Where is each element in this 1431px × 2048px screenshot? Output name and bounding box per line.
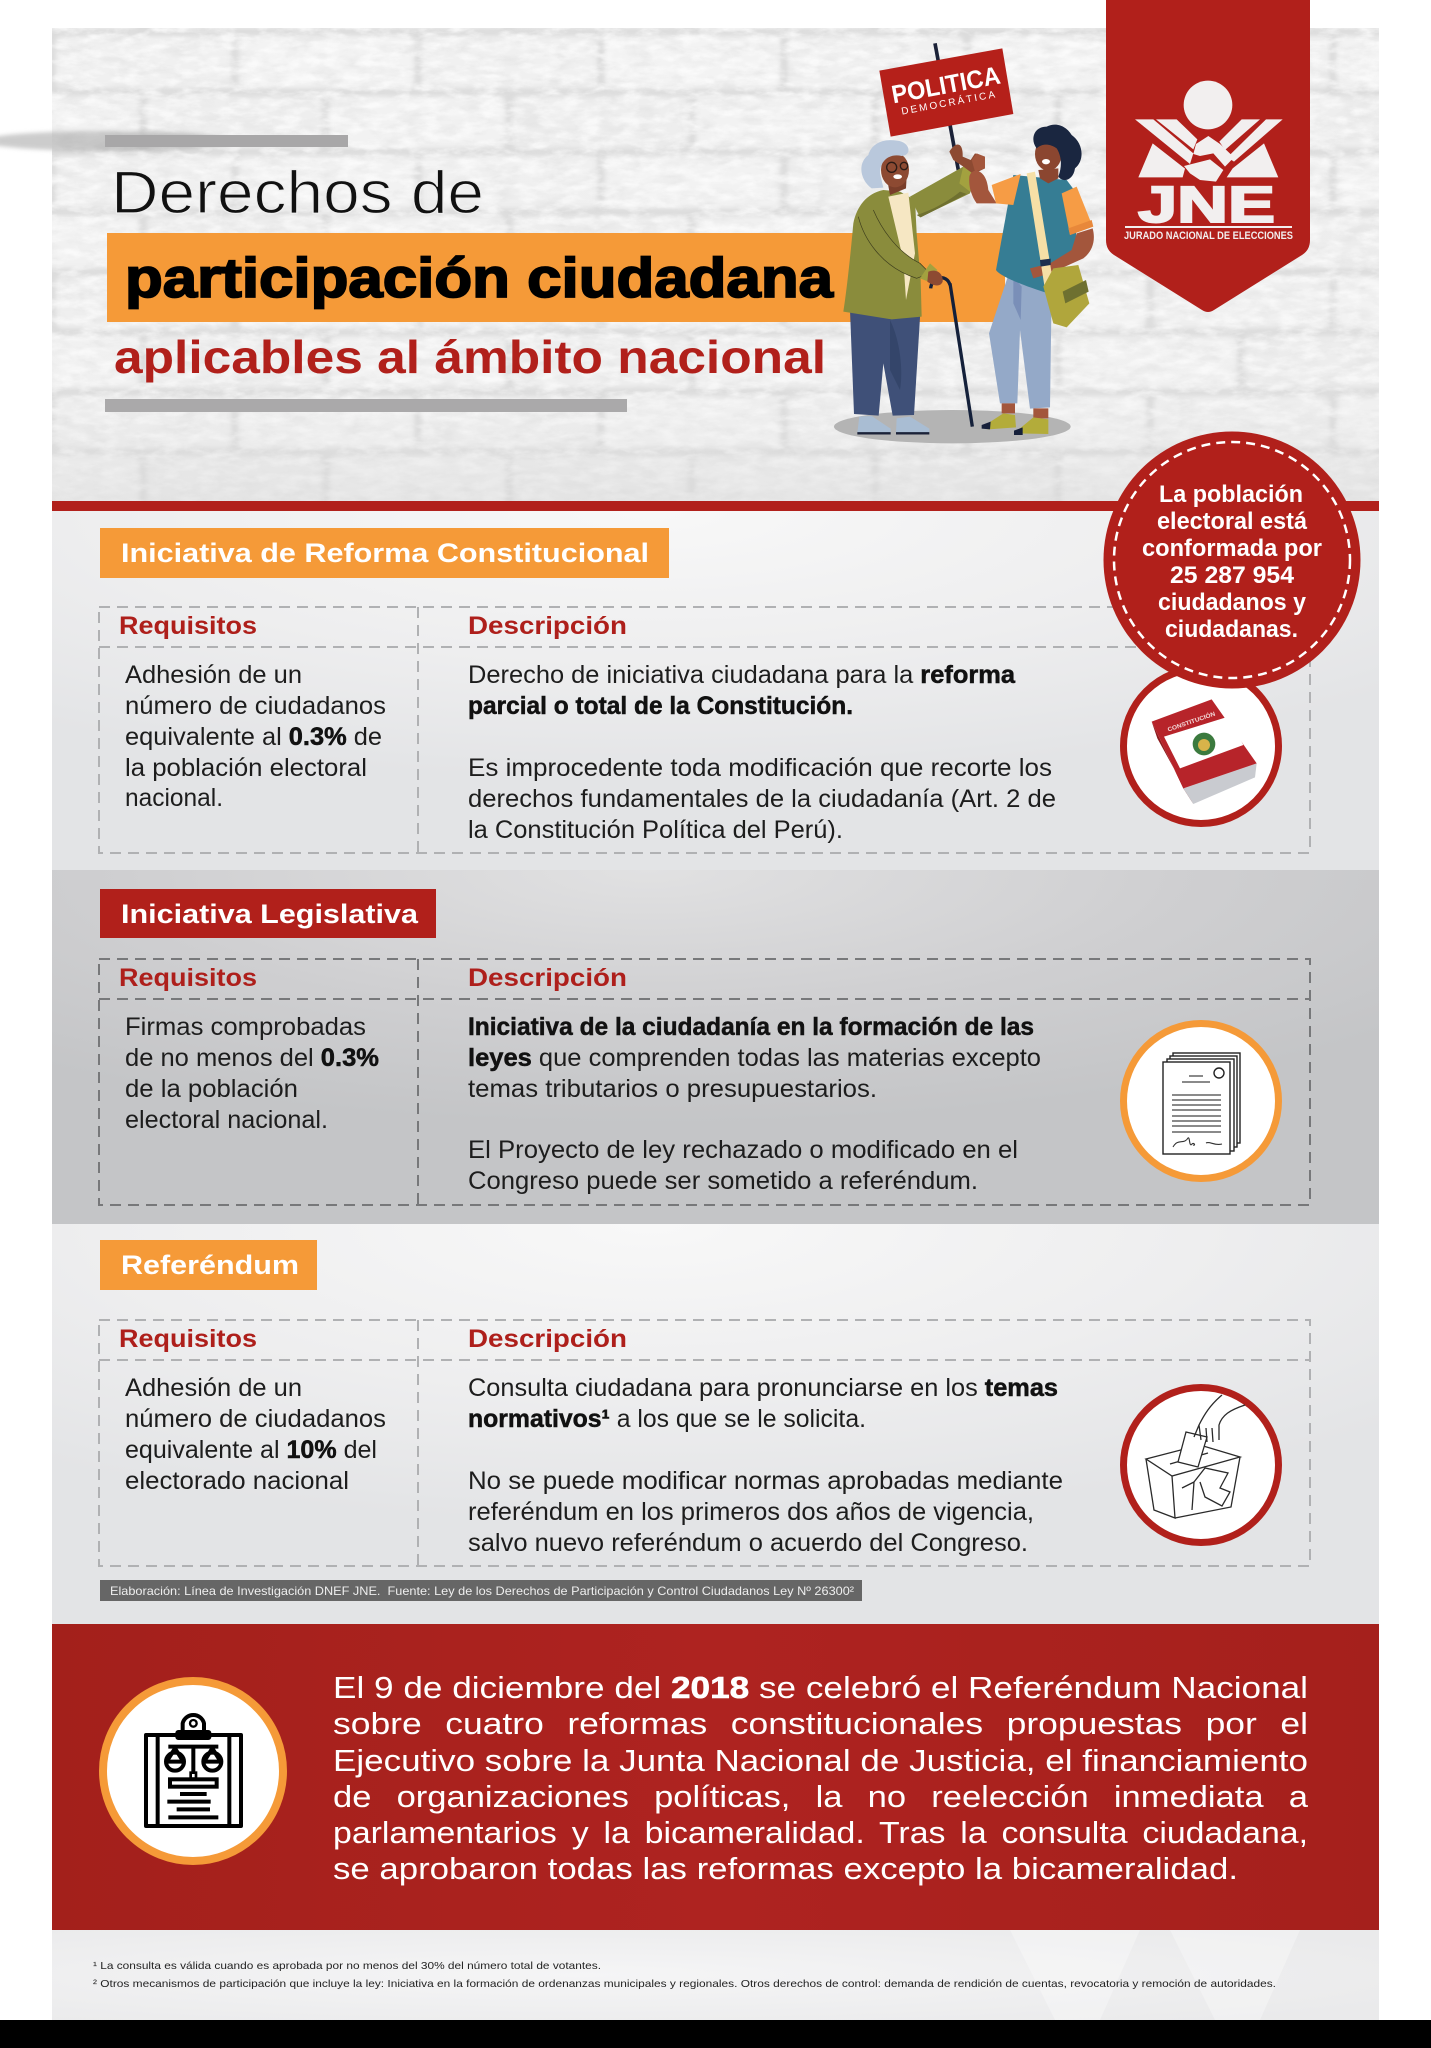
requisitos text 1: número de ciudadanos [125,692,386,720]
panel text: parlamentarios y la bicameralidad. Tras la consulta ciudadana, [333,1815,1308,1850]
section band: reforma constitucional [52,511,1379,870]
requisitos text 2 [125,1013,379,1134]
logo letters: JNE [1138,176,1275,233]
descripcion text 2: Iniciativa de la ciudadanía en la formación de las [468,1013,1034,1041]
callout badge: electoral population: La población [1159,481,1303,508]
dashed table 1 [99,607,1310,853]
dashed table 3 [99,1320,1310,1566]
descripcion text 3 [468,1374,1063,1557]
requisitos text 3: número de ciudadanos [125,1405,386,1433]
JNE banner with logo [1106,0,1310,312]
title line 2: participación ciudadana [125,246,834,309]
requisitos text 1 [125,661,386,812]
title line 3: aplicables al ámbito nacional [114,331,826,383]
footnotes: ¹ La consulta es válida cuando es aprobada por no menos del 30% del número total de votantes. [93,1960,601,1972]
descripcion text 1 [468,661,1056,844]
requisitos text 3 [125,1374,386,1495]
descripcion text 3: Consulta ciudadana para pronunciarse en los temas [468,1374,1058,1402]
descripcion text 1: Derecho de iniciativa ciudadana para la reforma [468,661,1016,689]
descripcion text 1: parcial o total de la Constitución. [468,692,853,720]
dashed table 2 [99,959,1310,1205]
icon: ballot box [1124,1388,1278,1542]
source strip: Elaboración: Línea de Investigación DNEF JNE. Fuente: Ley de los Derechos de Participación y Control Ciudadanos Ley Nº 26300² [110,1584,854,1598]
callout badge: electoral population: electoral está [1157,508,1308,535]
label: iniciativa legislativa: Iniciativa Legislativa [121,899,419,929]
descripcion text 2: leyes que comprenden todas las materias excepto [468,1044,1041,1072]
footnotes [93,1960,1276,1990]
headings table 3: Descripción [468,1325,627,1353]
requisitos text 1: Adhesión de un [125,661,302,689]
callout badge: electoral population: ciudadanos y [1158,589,1307,616]
requisitos text 3: Adhesión de un [125,1374,302,1402]
title highlight bar [107,233,1005,322]
headings table 1 [119,612,627,640]
red divider line [52,501,1379,511]
requisitos text 2: de la población [125,1075,298,1103]
requisitos text 2: Firmas comprobadas [125,1013,366,1041]
descripcion text 2 [468,1013,1041,1195]
panel text: sobre cuatro reformas constitucionales propuestas por el [333,1706,1308,1741]
panel text: Ejecutivo sobre la Junta Nacional de Justicia, el financiamiento [333,1743,1308,1778]
requisitos text 3: equivalente al 10% del [125,1436,377,1464]
panel text: de organizaciones políticas, la no reelección inmediata a [333,1779,1309,1814]
logo mark [1135,81,1283,182]
title line 1: Derechos de [111,159,484,226]
sign [879,48,1013,137]
descripcion text 3: normativos¹ a los que se le solicita. [468,1405,866,1433]
footnotes: ² Otros mecanismos de participación que incluye la ley: Iniciativa en la formación de ordenanzas municipales y regionales. Otros derechos de control: demanda de rendición de cuentas, revocatoria y remoción de autoridades. [93,1978,1276,1990]
headings table 3: Requisitos [119,1325,257,1353]
panel text: El 9 de diciembre del 2018 se celebró el Referéndum Nacional [333,1670,1308,1705]
label: iniciativa de reforma constitucional: Iniciativa de Reforma Constitucional [121,538,649,568]
label: referendum [100,1240,317,1290]
panel text: se aprobaron todas las reformas excepto la bicameralidad. [333,1851,1238,1886]
logo subtitle: JURADO NACIONAL DE ELECCIONES [1124,230,1293,242]
footer band [52,1930,1379,2020]
section band: referendum [52,1224,1379,1624]
label: iniciativa de reforma constitucional [100,528,669,578]
descripcion text 1: Es improcedente toda modificación que recorte los [468,754,1052,782]
headings table 2 [119,964,627,992]
red panel: referendum 2018 [52,1624,1379,1930]
icon: document stack [1124,1024,1278,1178]
panel text [333,1670,1309,1886]
sign: DEMOCRÁTICA [900,87,996,118]
callout badge: electoral population: ciudadanas. [1165,616,1298,643]
requisitos text 2: de no menos del 0.3% [125,1044,379,1072]
callout badge: electoral population: 25 287 954 [1170,562,1295,589]
requisitos text 3: electorado nacional [125,1467,349,1495]
descripcion text 2: Congreso puede ser sometido a referéndum. [468,1167,978,1195]
label: iniciativa legislativa [100,889,436,938]
icon: justice document [103,1681,283,1861]
requisitos text 2: electoral nacional. [125,1106,328,1134]
headings table 1: Descripción [468,612,627,640]
descripcion text 3: No se puede modificar normas aprobadas mediante [468,1467,1063,1495]
icon: constitution book: CONSTITUCIÓN [1166,710,1216,734]
requisitos text 1: la población electoral [125,754,367,782]
bottom grey bar [105,399,627,412]
icon: constitution book [1124,668,1278,824]
callout badge: electoral population [1104,432,1360,688]
descripcion text 3: referéndum en los primeros dos años de vigencia, [468,1498,1034,1526]
descripcion text 1: la Constitución Política del Perú). [468,816,843,844]
smudge and top grey bar [0,131,348,151]
person: older woman [843,140,985,433]
descripcion text 3: salvo nuevo referéndum o acuerdo del Congreso. [468,1529,1028,1557]
illustration: two citizens with sign [834,43,1094,443]
headings table 3 [119,1325,627,1353]
descripcion text 1: derechos fundamentales de la ciudadanía (Art. 2 de [468,785,1056,813]
label: referendum: Referéndum [121,1250,299,1280]
header panel: brick wall [40,16,1391,513]
section band: iniciativa legislativa [52,870,1379,1224]
headings table 1: Requisitos [119,612,257,640]
sign: POLITICA [889,62,1003,109]
person: young woman [969,125,1094,435]
requisitos text 1: nacional. [125,784,223,812]
headings table 2: Descripción [468,964,627,992]
requisitos text 1: equivalente al 0.3% de [125,723,382,751]
descripcion text 2: El Proyecto de ley rechazado o modificado en el [468,1136,1018,1164]
source strip [100,1580,862,1601]
descripcion text 2: temas tributarios o presupuestarios. [468,1075,877,1103]
callout badge: electoral population: conformada por [1142,535,1322,562]
bottom black strip [0,2020,1431,2048]
headings table 2: Requisitos [119,964,257,992]
